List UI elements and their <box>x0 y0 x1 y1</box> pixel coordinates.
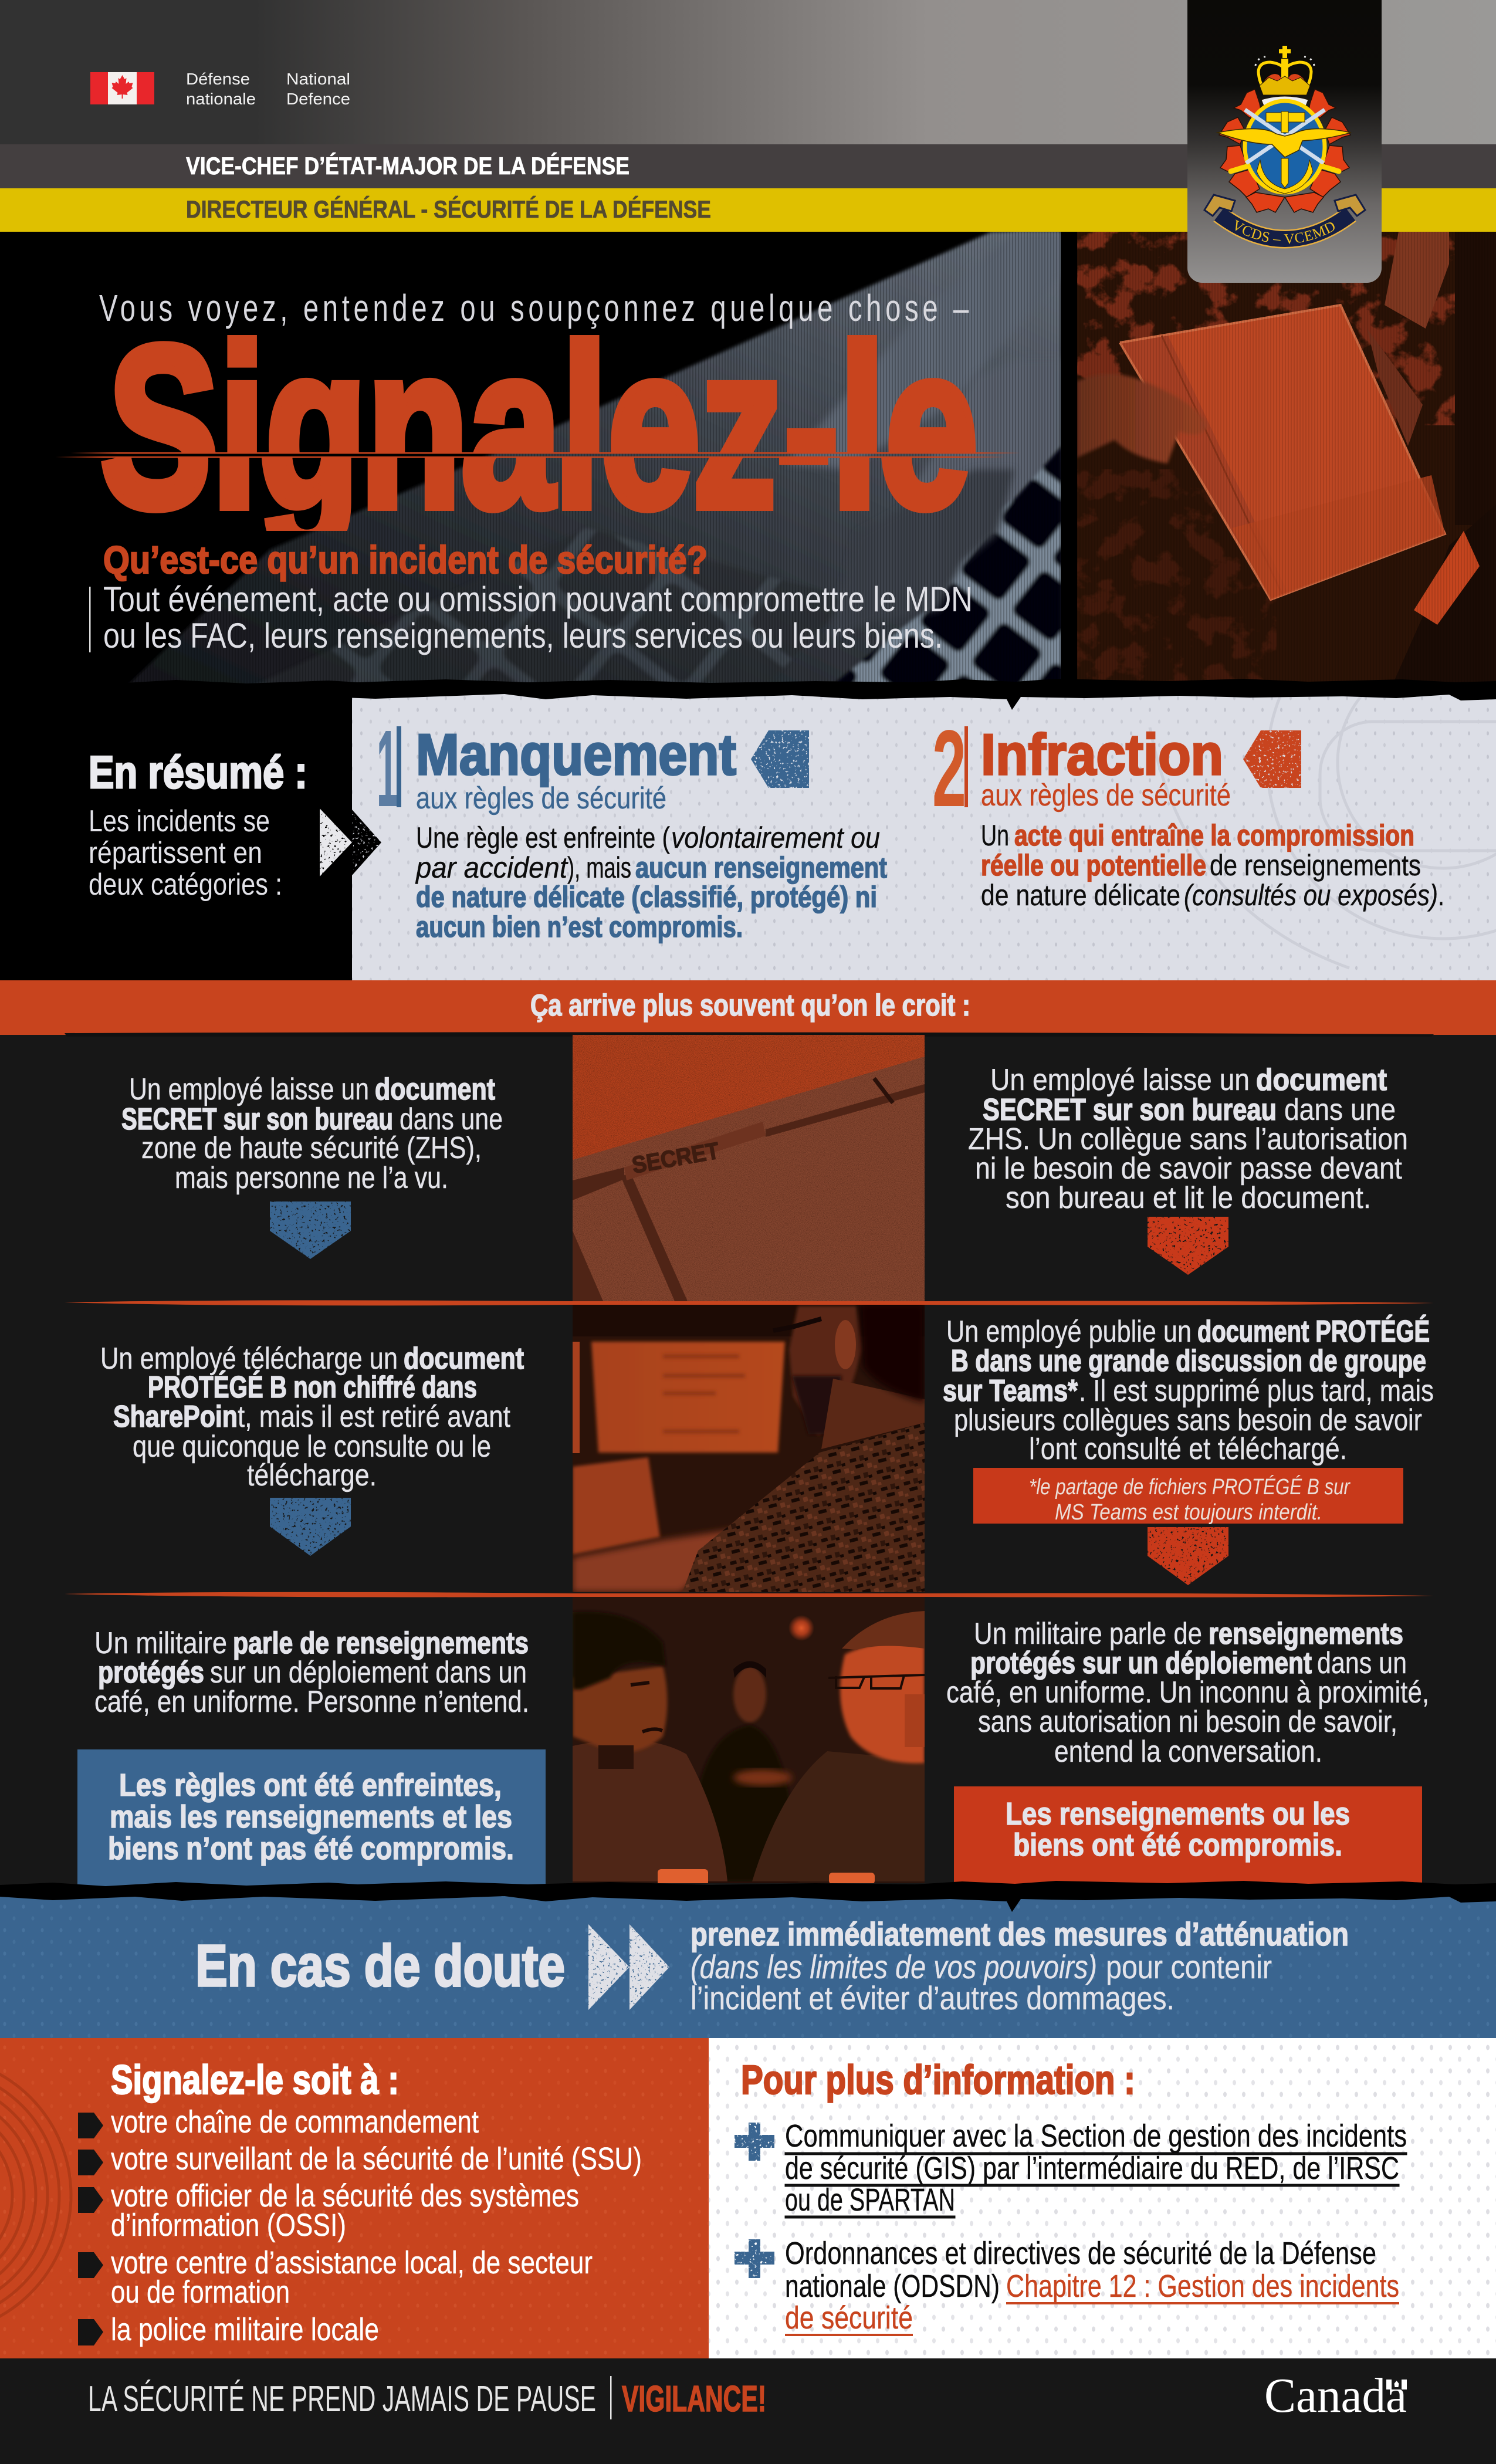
callout: rules broken <box>77 1749 546 1887</box>
icon: orange down arrow 1 <box>1148 1217 1228 1275</box>
divider 1 <box>65 1300 1434 1305</box>
icon: Canadian flag <box>90 72 154 104</box>
tagline: Vous voyez, entendez ou soupçonnez quelque chose – <box>99 287 973 329</box>
icon: double chevrons <box>588 1924 669 2010</box>
title: Signalez-le split: Signalez-le <box>108 299 978 557</box>
title: Signalez-le split: Signalez-le <box>100 299 970 557</box>
head <box>789 1306 862 1436</box>
row 3 left: manquement example: parle de renseignements <box>233 1626 529 1660</box>
icon: orange down arrow 2 <box>1148 1527 1228 1585</box>
motto scroll <box>1203 194 1366 249</box>
text: mitigation: (dans les limites de vos pouvoirs) <box>691 1948 1097 1985</box>
link: security orders: de sécurité <box>785 2300 913 2336</box>
row 2 right: infraction example: . Il est supprimé plus tard, mais <box>1079 1374 1434 1408</box>
photo: soldier at monitors <box>573 1304 925 1592</box>
row 1 left: manquement example: zone de haute sécurité (ZHS), <box>141 1131 482 1165</box>
list: la police militaire locale <box>111 2312 379 2347</box>
list: ou de formation <box>111 2275 290 2310</box>
department wordmark: nationale <box>186 90 256 108</box>
row 1 left: manquement example: mais personne ne l’a vu. <box>175 1161 448 1195</box>
photo: secret folder <box>573 1035 925 1301</box>
department wordmark: Défense <box>186 70 250 88</box>
heading: en résumé: En résumé : <box>89 746 307 798</box>
summary panel: light right <box>352 694 1496 980</box>
icon: plus 2 <box>735 2239 774 2278</box>
row 1 right: infraction example: Un employé laisse un <box>990 1063 1250 1097</box>
panel: report to <box>0 2038 709 2358</box>
swords <box>1245 110 1325 163</box>
row 2 right: infraction example: Un employé publie un <box>946 1315 1192 1349</box>
row 1 right: infraction example: document <box>1256 1063 1387 1097</box>
description: de nature délicate <box>981 879 1180 912</box>
torn edge: hero to summary <box>0 679 1496 710</box>
row 3 left: manquement example: protégés <box>98 1656 204 1690</box>
arrow: summary pointer <box>320 808 381 876</box>
row 2 right: infraction example: document PROTÉGÉ <box>1197 1315 1430 1349</box>
heading: infraction: Infraction <box>981 722 1223 787</box>
row 1 left: manquement example: dans une <box>400 1102 503 1136</box>
description: par accident <box>415 851 568 884</box>
row 1 left: manquement example: document <box>375 1072 495 1106</box>
row 1 right: infraction example: SECRET sur son bureau <box>983 1093 1277 1127</box>
link: GIS section: ou de SPARTAN <box>785 2182 955 2218</box>
row 2 left: manquement example: PROTÉGÉ B non chiffré dans <box>148 1370 477 1404</box>
row 2 right: infraction example <box>943 1315 1434 1466</box>
text: two categories: Les incidents se <box>89 804 270 838</box>
banner: vice-chief <box>0 144 1496 188</box>
description: (consultés ou exposés) <box>1184 879 1438 912</box>
document <box>1168 306 1443 592</box>
photo: hand holding secret document <box>1077 232 1496 689</box>
description: acte qui entraîne la compromission <box>1014 819 1414 852</box>
window frame <box>1385 232 1449 329</box>
row 2 left: manquement example: document <box>404 1342 524 1376</box>
row 2 left: manquement example: SharePoin <box>113 1400 238 1434</box>
bullets <box>78 2113 103 2345</box>
banner: director general <box>0 188 1496 232</box>
description: réelle ou potentielle <box>981 849 1206 882</box>
row 1 right: infraction example: dans une <box>1284 1093 1396 1127</box>
callout: teams footnote: *le partage de fichiers PROTÉGÉ B sur <box>1029 1474 1351 1500</box>
link: security orders: Chapitre 12 : Gestion des incidents <box>1006 2269 1399 2304</box>
glasses <box>773 1319 821 1331</box>
list: d’information (OSSI) <box>111 2208 346 2243</box>
vigilance: VIGILANCE! <box>622 2379 766 2419</box>
department wordmark: National <box>286 70 350 88</box>
callout: rules broken: mais les renseignements et les <box>110 1799 512 1835</box>
callout: information compromised: biens ont été compromis. <box>1013 1827 1342 1863</box>
heading: Pour plus d’information : <box>741 2057 1135 2103</box>
description <box>981 819 1444 912</box>
row 3 left: manquement example: sur un déploiement dans un <box>210 1656 527 1690</box>
definition text <box>89 580 973 655</box>
description: de renseignements <box>1210 849 1421 882</box>
category 1: manquement: 1 <box>377 708 398 830</box>
description: Un <box>981 819 1009 852</box>
row 3 left: manquement example: café, en uniforme. Personne n’entend. <box>94 1685 529 1719</box>
heading: manquement: Manquement <box>416 722 736 787</box>
row 1 right: infraction example: ZHS. Un collègue sans l’autorisation <box>968 1122 1408 1156</box>
row 1 right: infraction example: son bureau et lit le document. <box>1006 1181 1371 1215</box>
paperclip <box>874 1078 893 1103</box>
row 3 right: infraction example: Un militaire parle de <box>974 1617 1202 1651</box>
icon: VCDS crest <box>1203 46 1366 249</box>
row 3 left: manquement example: Un militaire <box>94 1626 227 1660</box>
band: ça arrive plus souvent: Ça arrive plus souvent qu’on le croit : <box>530 989 970 1023</box>
text: two categories: deux catégories : <box>89 868 282 902</box>
header: government identity <box>0 0 1496 144</box>
row 3 left: manquement example <box>94 1626 529 1719</box>
definition text: Tout événement, acte ou omission pouvant compromettre le MDN <box>103 580 973 619</box>
shield <box>1245 101 1325 192</box>
description: de nature délicate (classifié, protégé) ni <box>416 881 877 913</box>
callout: information compromised <box>954 1786 1422 1887</box>
callout: information compromised: Les renseignements ou les <box>1006 1796 1350 1832</box>
banner: director general: DIRECTEUR GÉNÉRAL - SÉCURITÉ DE LA DÉFENSE <box>186 195 711 223</box>
list: votre surveillant de la sécurité de l’unité (SSU) <box>111 2141 642 2177</box>
description <box>415 821 887 943</box>
row 1 left: manquement example: Un employé laisse un <box>129 1072 369 1106</box>
callout: teams footnote: MS Teams est toujours interdit. <box>1055 1500 1322 1525</box>
row 2 left: manquement example: Un employé télécharge un <box>100 1342 398 1376</box>
row 3 right: infraction example <box>946 1617 1429 1769</box>
link: security orders: nationale (ODSDN) <box>785 2269 1000 2304</box>
row 2 left: manquement example: t, mais il est retiré avant <box>238 1400 510 1434</box>
woman <box>573 1612 727 1881</box>
hero background <box>0 232 1496 695</box>
folder label SECRET: SECRET <box>630 1138 721 1179</box>
background person <box>692 1661 798 1881</box>
row 3 right: infraction example: sans autorisation ni besoin de savoir, <box>978 1705 1397 1739</box>
list: votre officier de la sécurité des systèmes <box>111 2178 579 2213</box>
heading: En cas de doute <box>195 1933 565 1999</box>
summary panel: left black <box>0 686 352 980</box>
description: aucun renseignement <box>635 851 887 884</box>
row 1 right: infraction example <box>968 1063 1408 1215</box>
slogan: LA SÉCURITÉ NE PREND JAMAIS DE PAUSE <box>88 2379 596 2419</box>
definition text: ou les FAC, leurs renseignements, leurs services ou leurs biens. <box>103 616 943 655</box>
row 1 left: manquement example: SECRET sur son bureau <box>121 1102 393 1136</box>
row 3 right: infraction example: renseignements <box>1209 1617 1403 1651</box>
text: two categories <box>89 804 282 902</box>
row 3 right: infraction example: dans un <box>1317 1646 1407 1680</box>
maple leaves <box>1219 89 1351 212</box>
cannon and anchor <box>1257 111 1313 194</box>
text: mitigation: l’incident et éviter d’autres dommages. <box>691 1979 1175 2016</box>
description: volontairement ou <box>671 821 880 854</box>
icon: orange arrow <box>1243 730 1301 788</box>
text: two categories: répartissent en <box>89 836 262 870</box>
uniform patch <box>1395 525 1496 682</box>
link: GIS section <box>785 2118 1407 2218</box>
row 3 right: infraction example: protégés sur un déploiement <box>970 1646 1312 1680</box>
banner: vice-chief: VICE-CHEF D’ÉTAT-MAJOR DE LA DÉFENSE <box>186 152 629 180</box>
subheading: aux règles de sécurité <box>981 779 1231 813</box>
target rings <box>0 2057 71 2334</box>
category 2: infraction <box>932 708 1444 912</box>
icon: blue arrow <box>751 730 809 788</box>
row 1 right: infraction example: ni le besoin de savoir passe devant <box>975 1152 1402 1186</box>
text: mitigation <box>691 1915 1349 2016</box>
list <box>111 2104 642 2347</box>
row 1 left: manquement example <box>121 1072 503 1195</box>
photo: keyboard and hand <box>129 232 1061 683</box>
subheading: aux règles de sécurité <box>416 781 666 815</box>
row 2 left: manquement example: télécharge. <box>247 1458 377 1492</box>
callout: rules broken: biens n’ont pas été compromis. <box>108 1831 514 1866</box>
description: ), mais <box>567 851 631 884</box>
panel: more information <box>709 2038 1496 2358</box>
text: mitigation: prenez immédiatement des mesures d’atténuation <box>691 1915 1349 1952</box>
canada wordmark: Canada <box>1264 2368 1407 2423</box>
callout: teams footnote <box>973 1468 1403 1525</box>
emblem tab <box>1187 0 1382 283</box>
number 2: 2 <box>932 708 966 830</box>
description: aucun bien n’est compromis. <box>416 911 743 943</box>
coffee cups <box>658 1869 875 1886</box>
title: Signalez-le split <box>57 335 1017 531</box>
row 2 left: manquement example: que quiconque le consulte ou le <box>133 1430 491 1464</box>
text: mitigation: pour contenir <box>1106 1948 1272 1985</box>
eagle <box>1217 128 1351 157</box>
icon: blue down arrow 2 <box>270 1498 351 1556</box>
band: ça arrive plus souvent <box>0 980 1496 1037</box>
row 2 left: manquement example <box>100 1342 524 1492</box>
category 1: manquement <box>377 708 887 943</box>
link: security orders <box>785 2236 1399 2336</box>
heading: Signalez-le soit à : <box>111 2057 399 2103</box>
list: votre centre d’assistance local, de secteur <box>111 2245 593 2280</box>
motto scroll: VCDS – VCEMD <box>1236 219 1335 244</box>
icon: blue down arrow 1 <box>270 1201 351 1259</box>
torn edge: rows to band <box>0 1881 1496 1912</box>
row 3 right: infraction example: entend la conversation. <box>1054 1735 1322 1769</box>
row 2 right: infraction example: sur Teams* <box>943 1374 1078 1408</box>
hand <box>1077 374 1207 463</box>
department wordmark: Defence <box>286 90 350 108</box>
list: votre chaîne de commandement <box>111 2104 479 2140</box>
heading: what is an incident: Qu’est-ce qu’un incident de sécurité? <box>103 538 708 581</box>
department wordmark <box>186 70 350 108</box>
band: en cas de doute <box>0 1892 1496 2038</box>
divider 2 <box>65 1592 1434 1597</box>
glasses <box>828 1675 925 1688</box>
crown <box>1255 46 1314 106</box>
man <box>752 1611 925 1881</box>
icon: plus 1 <box>735 2123 774 2161</box>
description: Une règle est enfreinte ( <box>416 821 670 854</box>
description: . <box>1438 879 1444 912</box>
row 2 right: infraction example: l’ont consulté et téléchargé. <box>1029 1432 1347 1466</box>
callout: rules broken: Les règles ont été enfreintes, <box>119 1768 502 1803</box>
footer <box>0 2358 1496 2464</box>
bulb <box>788 1615 814 1641</box>
photo: three soldiers in a cafe <box>573 1596 925 1886</box>
